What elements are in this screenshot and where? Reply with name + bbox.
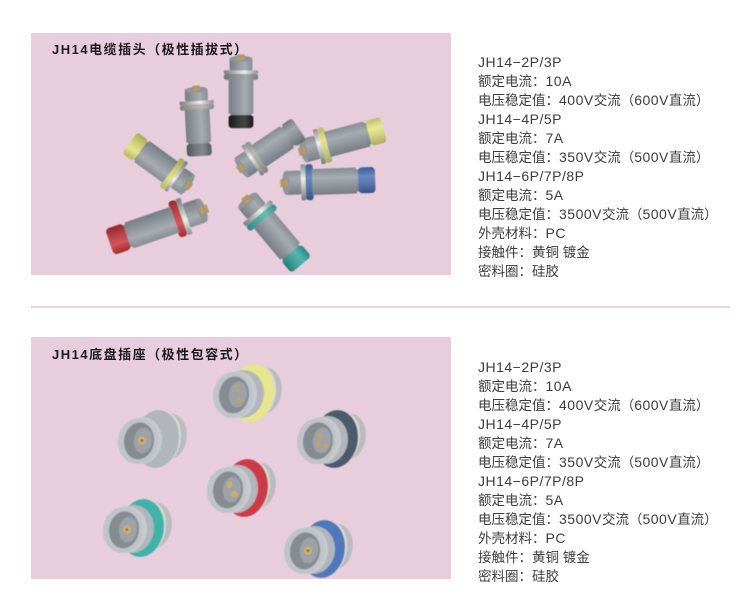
- heading: chassis socket: JH14底盘插座（极性包容式）: [52, 347, 249, 362]
- panel: chassis sockets: [31, 337, 451, 579]
- specifications: chassis socket: 接触件：黄铜 镀金: [478, 550, 590, 565]
- panel: cable plugs: [31, 33, 451, 275]
- specifications: cable plug: JH14−2P/3P: [478, 54, 562, 70]
- socket: yellow: [205, 356, 290, 431]
- specifications: chassis socket: JH14−4P/5P: [478, 416, 562, 432]
- specifications: cable plug: 额定电流：5A: [478, 187, 564, 203]
- heading: cable plug: JH14电缆插头（极性插拔式）: [52, 42, 249, 57]
- specifications: cable plug: 密料圈：硅胶: [478, 264, 559, 279]
- specifications: cable plug: JH14−6P/7P/8P: [478, 168, 585, 184]
- specifications: chassis socket: 电压稳定值：350V交流（500V直流）: [478, 454, 709, 470]
- specifications: cable plug: [478, 54, 718, 279]
- specifications: cable plug: 接触件：黄铜 镀金: [478, 245, 590, 260]
- plug: grey cap: [179, 85, 217, 157]
- specifications: cable plug: 电压稳定值：400V交流（600V直流）: [478, 92, 709, 108]
- plug: yellow cap left: [119, 128, 202, 202]
- specifications: cable plug: 外壳材料：PC: [478, 225, 566, 241]
- specifications: cable plug: 额定电流：10A: [478, 73, 572, 89]
- socket: red: [199, 451, 284, 526]
- socket: navy: [289, 402, 374, 477]
- specifications: chassis socket: 电压稳定值：3500V交流（500V直流）: [478, 511, 718, 527]
- specifications: chassis socket: JH14−2P/3P: [478, 359, 562, 375]
- specifications: chassis socket: 额定电流：5A: [478, 492, 564, 508]
- plug: red cap: [103, 190, 214, 260]
- specifications: chassis socket: 外壳材料：PC: [478, 530, 566, 546]
- specifications: cable plug: JH14−4P/5P: [478, 111, 562, 127]
- product photo: cable plugs: [105, 54, 387, 272]
- specifications: cable plug: 电压稳定值：3500V交流（500V直流）: [478, 206, 718, 222]
- specifications: chassis socket: 密料圈：硅胶: [478, 569, 559, 584]
- specifications: chassis socket: 电压稳定值：400V交流（600V直流）: [478, 397, 709, 413]
- socket: blue: [276, 512, 361, 587]
- specifications: cable plug: 额定电流：7A: [478, 130, 564, 146]
- specifications: chassis socket: 额定电流：10A: [478, 378, 572, 394]
- plug: black cap: [224, 54, 258, 128]
- plug: yellow cap right: [294, 112, 388, 170]
- plug: blue cap: [280, 162, 376, 201]
- product photo: chassis sockets: [102, 364, 366, 579]
- specifications: chassis socket: JH14−6P/7P/8P: [478, 473, 585, 489]
- specifications: chassis socket: [478, 359, 718, 584]
- plug: grey cap centre: [228, 114, 309, 185]
- plug: teal cap: [230, 185, 315, 276]
- specifications: chassis socket: 额定电流：7A: [478, 435, 564, 451]
- specifications: cable plug: 电压稳定值：350V交流（500V直流）: [478, 149, 709, 165]
- socket: grey: [110, 402, 195, 477]
- socket: teal: [95, 491, 180, 566]
